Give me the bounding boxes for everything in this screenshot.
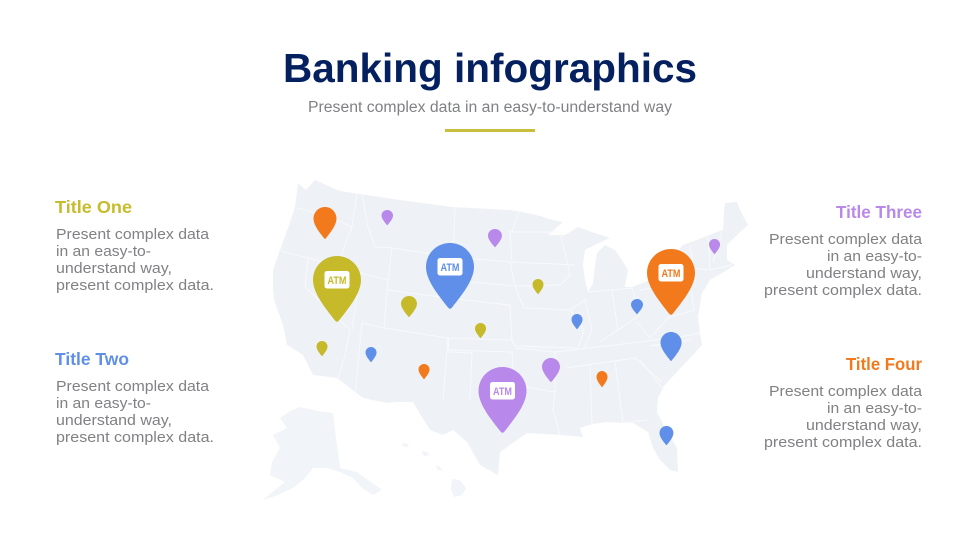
panel: title three: present complex data. (764, 283, 922, 299)
panel: title three: Title Three (836, 202, 922, 222)
pin: olive large with ATM badge: ATM (328, 275, 346, 287)
pin: orange large with ATM badge (647, 249, 695, 315)
panel: title three: in an easy-to- (827, 249, 922, 265)
panel: title four: present complex data. (764, 435, 922, 451)
pin: blue medium, North Carolina (660, 332, 682, 361)
panel: title two: Present complex data (56, 379, 210, 395)
panel: title four (764, 354, 923, 451)
pin: purple small, South Dakota (488, 229, 502, 247)
state borders (278, 193, 732, 435)
accent rule under the subtitle (445, 129, 535, 132)
pin: orange small, Oregon (314, 207, 336, 239)
pin: purple small, Montana (382, 210, 393, 225)
map of the United States (263, 180, 748, 500)
pin: olive small, Iowa (532, 279, 544, 294)
panel: title one (55, 197, 214, 294)
hawaii (402, 443, 466, 497)
pin: blue small, Ohio (631, 299, 643, 314)
panel: title four: in an easy-to- (827, 401, 922, 417)
panel: title one: in an easy-to- (56, 244, 151, 260)
panel: title two: Title Two (55, 349, 129, 369)
panel: title two (55, 349, 214, 446)
pin: blue large with ATM badge (426, 243, 474, 309)
panel: title one: understand way, (56, 261, 172, 277)
pin: olive small, Kansas (475, 323, 486, 338)
pin: olive large with ATM badge (313, 256, 361, 322)
panel: title one: Title One (55, 197, 132, 217)
pin: blue small, Florida (660, 426, 673, 445)
alaska (263, 407, 382, 500)
panel: title two: in an easy-to- (56, 396, 151, 412)
contiguous states (273, 180, 748, 475)
pin: purple medium, Arkansas (542, 358, 560, 382)
panel: title four: Present complex data (769, 384, 923, 400)
panel: title two: understand way, (56, 413, 172, 429)
pin: olive medium, Colorado (401, 296, 417, 317)
pin: blue small, Illinois (572, 314, 583, 329)
title: Banking infographics (283, 45, 697, 91)
pin: olive small, California (316, 341, 328, 356)
pin: purple large with ATM badge (478, 367, 526, 433)
subtitle: Present complex data in an easy-to-understand way (308, 99, 672, 116)
pin: purple large with ATM badge: ATM (493, 386, 512, 398)
panel: title four: Title Four (846, 354, 922, 374)
panel: title one: present complex data. (56, 278, 214, 294)
panel: title two: present complex data. (56, 430, 214, 446)
panel: title three: understand way, (806, 266, 922, 282)
pin: blue large with ATM badge: ATM (440, 262, 460, 274)
pin: orange small, Alabama (596, 371, 608, 387)
pin: orange small, New Mexico (418, 364, 430, 379)
panel: title three (764, 202, 923, 299)
pin: orange large with ATM badge: ATM (662, 268, 680, 280)
panel: title one: Present complex data (56, 227, 210, 243)
panel: title three: Present complex data (769, 232, 923, 248)
pin: blue small, Arizona (366, 347, 377, 362)
panel: title four: understand way, (806, 418, 922, 434)
pin: purple small, New Hampshire (709, 239, 720, 254)
